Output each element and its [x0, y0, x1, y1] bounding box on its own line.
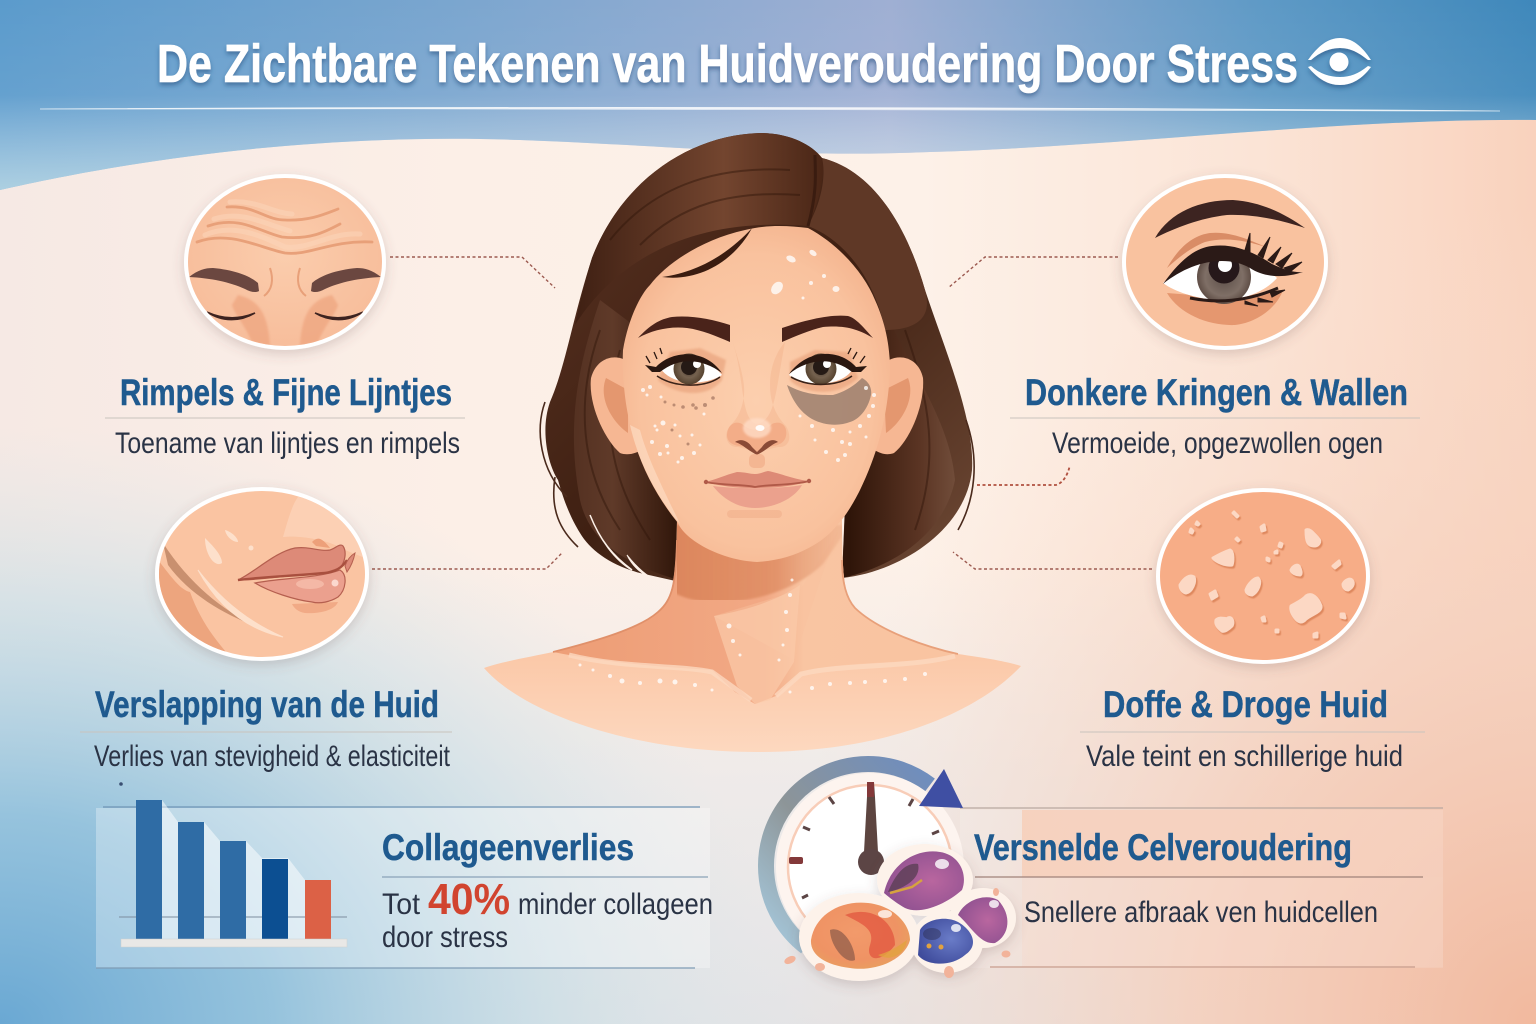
icon: cells [783, 844, 1016, 981]
lips [704, 471, 811, 518]
panel: Rimpels & Fijne Lijntjes: Toename van lijntjes en rimpels [115, 427, 460, 460]
panel: Collageenverlies: Collageenverlies [382, 827, 634, 868]
icon: clock [766, 764, 964, 961]
central portrait [484, 133, 1021, 752]
panel: Verslapping van de Huid: Verlies van stevigheid & elasticiteit [94, 740, 451, 773]
text block: 40 percent: door stress [382, 921, 508, 954]
text block: 40 percent: minder collageen [518, 888, 713, 921]
brows [638, 316, 730, 342]
bar chart [119, 782, 347, 947]
panel: Versnelde Celveroudering [766, 764, 1443, 981]
text block: 40 percent [382, 875, 713, 954]
panel: Donkere Kringen & Wallen [1025, 170, 1408, 460]
heading: Rimpels & Fijne Lijntjes [120, 372, 452, 413]
panel: Collageenverlies [96, 782, 713, 968]
icon: flaky skin [1150, 485, 1375, 670]
panel: Versnelde Celveroudering: Snellere afbraak ven huidcellen [1024, 896, 1378, 929]
panel: Verslapping van de Huid: Verslapping van de Huid [95, 684, 439, 725]
panel: Donkere Kringen & Wallen: Vermoeide, opgezwollen ogen [1052, 427, 1383, 460]
right eye [789, 348, 867, 384]
icon: sagging skin and lips [150, 485, 375, 665]
icon: forehead wrinkles [180, 170, 390, 355]
face [623, 226, 890, 562]
stray strands [540, 402, 974, 547]
hair [545, 133, 972, 582]
panel: Versnelde Celveroudering: Versnelde Celveroudering [974, 827, 1352, 868]
left eye [645, 348, 722, 385]
shoulders [484, 520, 1021, 752]
connectors [372, 257, 1152, 569]
eye sockets [658, 348, 858, 393]
panel: Doffe & Droge Huid [1086, 485, 1403, 773]
panel: Rimpels & Fijne Lijntjes [115, 170, 460, 460]
dark circle [787, 378, 871, 425]
panel: Doffe & Droge Huid: Doffe & Droge Huid [1103, 684, 1388, 725]
panel: Doffe & Droge Huid: Vale teint en schillerige huid [1086, 740, 1403, 773]
nose [726, 342, 789, 468]
panel: Verslapping van de Huid [94, 485, 451, 773]
ears [591, 357, 642, 454]
freckles [578, 249, 927, 693]
text block: 40 percent: Tot [382, 888, 421, 921]
text block: 40 percent: 40% [428, 875, 510, 924]
icon: eye [1308, 38, 1371, 85]
icon: eye with dark circle [1120, 170, 1330, 355]
panel: Donkere Kringen & Wallen: Donkere Kringen & Wallen [1025, 372, 1408, 413]
